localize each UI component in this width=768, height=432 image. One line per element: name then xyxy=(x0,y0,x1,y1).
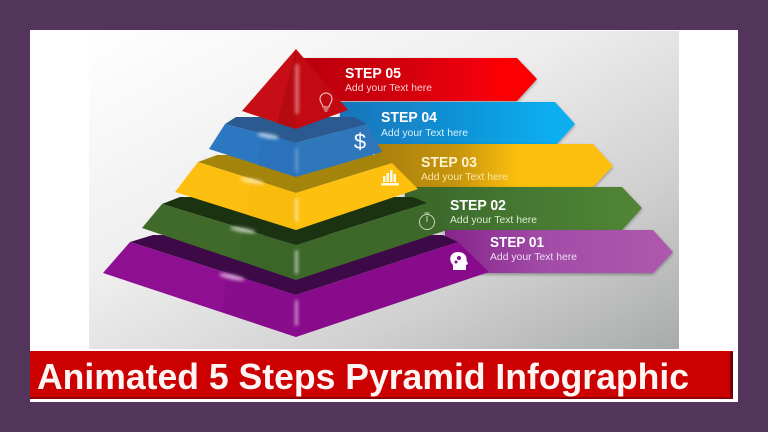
gradient backdrop xyxy=(89,31,679,349)
ribbon: step 04: Add your Text here xyxy=(381,127,468,139)
ribbon: step 02: Add your Text here xyxy=(450,214,537,226)
ribbon: step 02: STEP 02 xyxy=(450,197,506,214)
pyramid tier: red apex xyxy=(242,49,348,129)
icon: bar chart xyxy=(381,170,399,186)
pyramid tier: yellow xyxy=(175,155,418,230)
icon: head with gears xyxy=(450,252,468,270)
icon: stopwatch xyxy=(420,213,434,230)
ribbon: step 01 xyxy=(445,230,673,273)
pyramid tier: green xyxy=(142,197,447,280)
ribbon: step 03: Add your Text here xyxy=(421,171,508,183)
pyramid tier: blue xyxy=(209,117,382,177)
ribbon: step 02 xyxy=(405,187,642,230)
ribbon: step 01: Add your Text here xyxy=(490,251,577,263)
ribbon: step 03 xyxy=(375,144,613,187)
ribbon: step 05: STEP 05 xyxy=(345,65,401,82)
ribbon: step 05 xyxy=(300,58,537,101)
ribbon: step 05: Add your Text here xyxy=(345,82,432,94)
white slide panel xyxy=(30,30,738,402)
icon: dollar sign: $ xyxy=(354,129,366,154)
ribbon: step 01: STEP 01 xyxy=(490,234,544,251)
ribbon: step 03: STEP 03 xyxy=(421,154,477,171)
title banner: Animated 5 Steps Pyramid Infographic xyxy=(37,356,689,397)
ribbon: step 04: STEP 04 xyxy=(381,109,438,126)
pyramid tier: purple xyxy=(103,235,489,337)
ribbon: step 04 xyxy=(340,102,575,146)
icon: light bulb xyxy=(320,93,332,111)
